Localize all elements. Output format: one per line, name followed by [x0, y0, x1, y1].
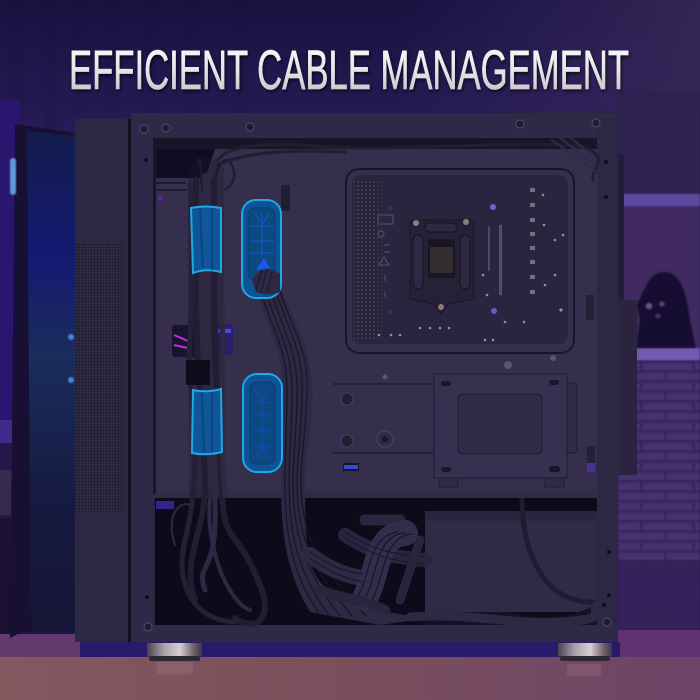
CPU socket backplate	[410, 219, 474, 314]
cables	[172, 135, 598, 625]
case feet	[147, 643, 612, 661]
side rail right	[597, 118, 618, 640]
highlight: left cable clip lower	[192, 389, 222, 454]
motherboard cutout	[345, 168, 575, 354]
power supply	[425, 498, 597, 625]
rear tray cutouts	[172, 185, 290, 357]
black connector	[186, 360, 210, 385]
open side door	[10, 124, 75, 638]
screws on rails	[140, 119, 600, 133]
left vertical bundle	[172, 170, 265, 624]
highlight: upper cable grommet	[242, 200, 281, 298]
left side wall	[0, 100, 22, 638]
rear expansion plate	[618, 300, 637, 475]
table top	[0, 630, 700, 700]
PSU chamber	[155, 498, 597, 625]
bottom rail	[138, 610, 618, 642]
case outer frame	[75, 111, 618, 640]
top run	[218, 144, 598, 180]
main sleeved cable	[258, 290, 430, 625]
right side brick wall	[618, 90, 700, 630]
front panel	[75, 119, 131, 642]
SSD bracket	[434, 374, 577, 487]
highlight: lower cable grommet	[243, 374, 282, 472]
PC case	[75, 111, 637, 642]
PSU cable tangle	[310, 520, 597, 622]
board solder points	[378, 188, 564, 341]
top rail	[131, 113, 617, 140]
top left opening	[153, 149, 215, 494]
compliance marks	[378, 215, 393, 297]
lower tray plate and drive bracket	[333, 295, 595, 487]
figurine helmet on shelf	[636, 272, 696, 348]
highlight: left cable clip upper	[191, 206, 221, 273]
main tray	[153, 140, 597, 497]
